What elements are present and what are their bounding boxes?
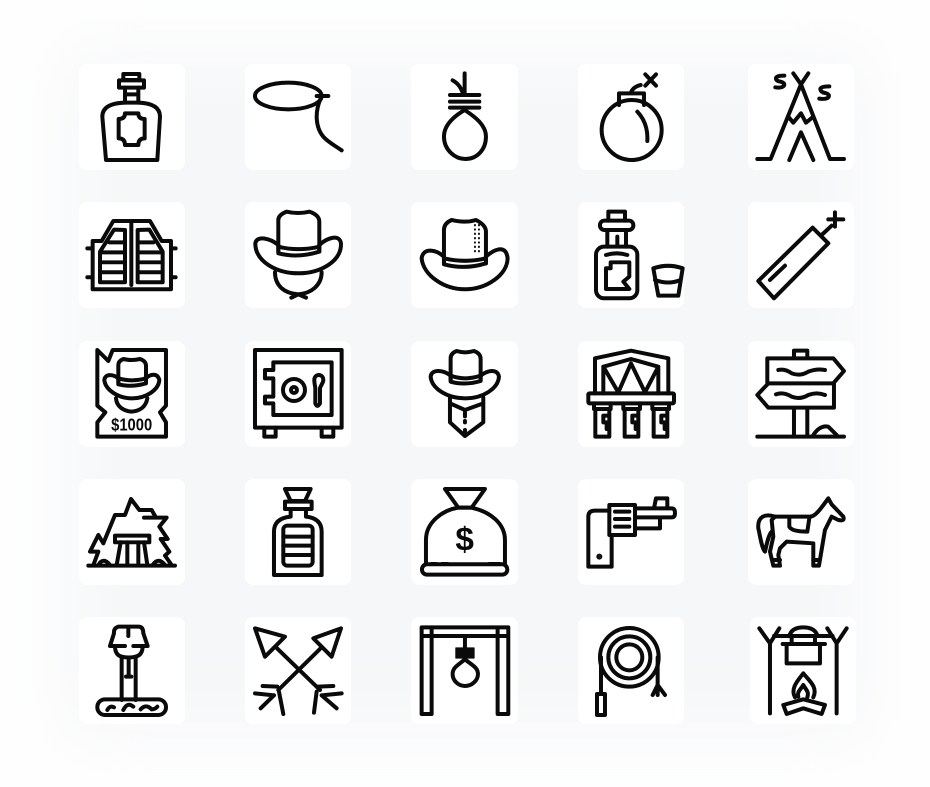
icon: horse: [758, 498, 844, 566]
icon: tomahawk post: [97, 627, 166, 715]
panel: revolver: [578, 479, 684, 585]
icon: money bag: $: [455, 522, 474, 559]
panel: crossed arrows: [245, 617, 351, 724]
panel: whiskey bottle: [79, 64, 185, 170]
icon: saloon doors: [87, 221, 176, 289]
icon: gallows: [422, 627, 508, 714]
panel: wanted poster: [79, 341, 185, 447]
panel: masked sheriff: [411, 341, 518, 447]
panel: dynamite: [748, 202, 854, 308]
panel: saloon doors: [79, 202, 185, 308]
icon: masked sheriff: [431, 351, 499, 436]
icon: rope coil: [597, 628, 665, 715]
panel: safe: [245, 341, 351, 447]
icon: bottle and shot glass: [596, 212, 683, 298]
icon: safe: [255, 350, 342, 437]
panel: horse: [748, 479, 854, 585]
panel: rope coil: [578, 617, 684, 724]
panel: bomb: [578, 64, 684, 170]
icon: crossed arrows: [255, 628, 342, 714]
panel: signpost: [748, 341, 854, 447]
panel: cowboy with bandana: [245, 202, 351, 308]
icon: corked bottle: [274, 489, 322, 575]
icon: bomb: [602, 74, 662, 160]
panel: money bag: [411, 479, 518, 585]
icon: revolver: [588, 498, 675, 567]
icon: teepee: [757, 73, 844, 160]
panel: gallows: [411, 617, 518, 724]
icon: covered bridge: [588, 351, 674, 437]
panel: covered bridge: [578, 341, 684, 447]
panel: campfire and pot: [750, 617, 856, 724]
panel: teepee: [748, 64, 854, 170]
panel: gold mine: [79, 479, 185, 585]
panel: corked bottle: [245, 479, 351, 585]
panel: lasso: [245, 64, 351, 170]
icon: noose: [444, 73, 486, 159]
icon: dynamite: [758, 212, 843, 298]
icon: stetson hat: [422, 220, 508, 289]
panel: noose: [411, 64, 518, 170]
icon: lasso: [255, 83, 342, 150]
icon: signpost: [757, 351, 844, 437]
icon: wanted poster: $1000: [111, 414, 152, 434]
panel: stetson hat: [411, 202, 518, 308]
panel: tomahawk post: [79, 617, 185, 724]
icon: gold mine: [88, 499, 175, 566]
icon: cowboy with bandana: [255, 212, 341, 298]
icon: campfire and pot: [759, 627, 847, 714]
icon: whiskey bottle: [102, 74, 160, 160]
panel: bottle and shot glass: [578, 202, 684, 308]
